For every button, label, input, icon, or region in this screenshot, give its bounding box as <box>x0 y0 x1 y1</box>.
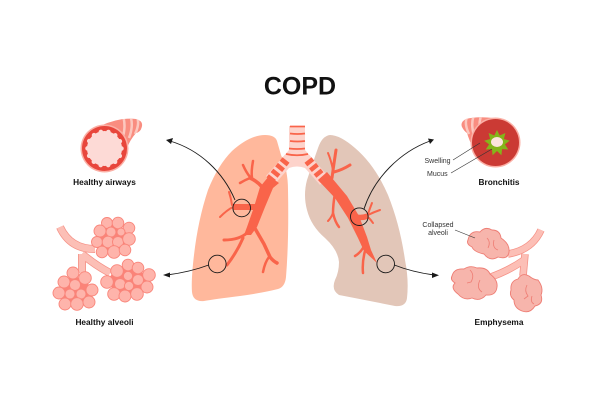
bronchiole tube <box>491 230 541 277</box>
left bronchial tree <box>220 161 279 272</box>
title: COPD <box>264 72 336 100</box>
mucus label and leader: Mucus <box>427 171 448 178</box>
emphysema illustration <box>451 228 542 312</box>
label: bronchitis: Bronchitis <box>478 177 520 187</box>
label: healthy alveoli: Healthy alveoli <box>75 317 134 327</box>
arrow to emphysema <box>394 265 439 278</box>
right lung <box>305 135 408 306</box>
arrow to bronchitis <box>364 138 434 209</box>
collapsed alveoli label and leader: Collapsed <box>422 222 454 229</box>
bronchiole tube <box>60 227 110 273</box>
collapsed alveoli label and leader <box>422 222 475 238</box>
arrow to healthy airways <box>166 138 235 200</box>
right bronchial tree <box>318 150 380 273</box>
left lung <box>192 135 288 301</box>
bronchitis illustration <box>462 113 520 168</box>
swelling label and leader: Swelling <box>424 158 451 165</box>
mucus star <box>484 130 510 155</box>
healthy airway illustration <box>80 113 142 172</box>
trachea and main bronchi <box>266 126 328 185</box>
label: emphysema: Emphysema <box>475 317 524 327</box>
arrow to healthy alveoli <box>163 265 209 278</box>
swelling label and leader <box>424 143 480 165</box>
airway opening <box>491 137 503 147</box>
magnifier circles <box>208 199 395 273</box>
mucus label and leader <box>427 149 492 178</box>
alveoli clusters <box>53 217 155 310</box>
collapsed alveoli label and leader: alveoli <box>428 230 448 237</box>
healthy alveoli illustration <box>53 217 155 310</box>
label: healthy airways: Healthy airways <box>73 177 136 187</box>
collapsed alveoli blobs <box>451 228 542 312</box>
blob creases <box>467 238 534 304</box>
